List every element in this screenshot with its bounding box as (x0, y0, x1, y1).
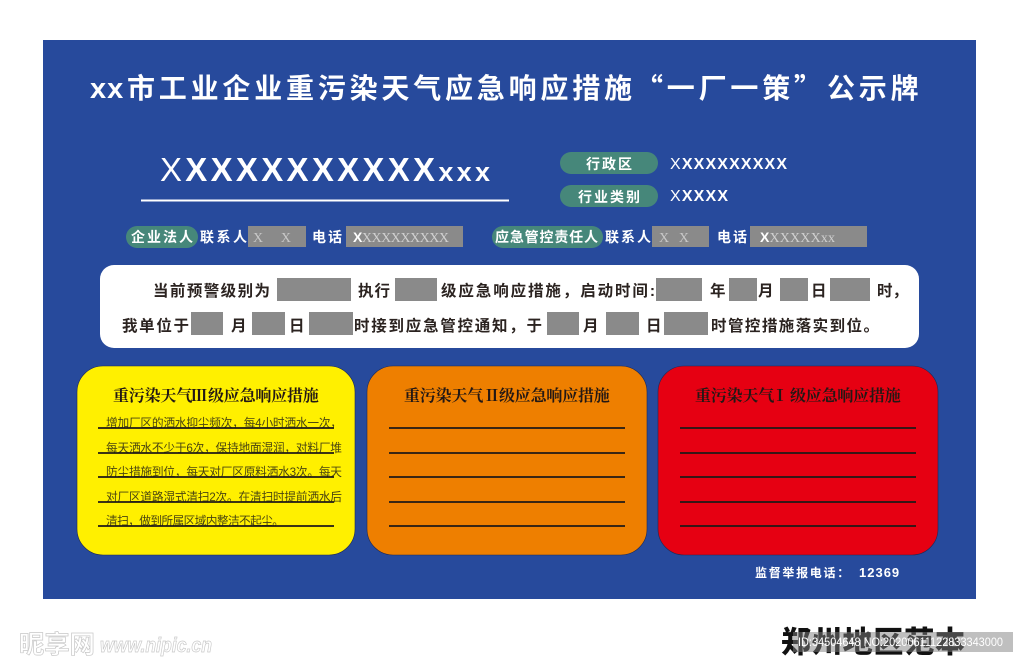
notice line 2 (122, 312, 879, 335)
heading: level I: 级应急响应措施 (790, 386, 901, 405)
level III text lines: 对厂区道路湿式清扫2次。在清扫时提前洒水后 (106, 490, 342, 504)
title: “一厂一策” (635, 67, 826, 107)
notice line 1: 年 (710, 281, 726, 300)
notice line 2: 时接到应急管控通知，于 (354, 316, 542, 335)
legal representative: X X (253, 231, 291, 246)
emergency manager: 应急管控责任人 (495, 229, 598, 245)
panel: blue signboard (43, 40, 976, 599)
legal representative (126, 226, 463, 248)
heading: level I: 重污染天气 (695, 388, 774, 405)
watermark logo: 昵享网 (19, 631, 95, 659)
legal representative: 联系人 (200, 229, 247, 245)
watermark logo: www.nipic.cn (100, 635, 212, 657)
heading: level I: Ⅰ (772, 388, 788, 405)
supervision hotline: 监督举报电话： (755, 565, 851, 580)
notice line 1: 时， (877, 282, 908, 300)
notice line 1: 级应急响应措施，启动时间: (441, 281, 655, 300)
notice line 2: 日 (646, 318, 662, 335)
title: 市工业企业重污染天气应急响应措施 (127, 73, 636, 104)
legal representative: 电话 (312, 229, 342, 245)
heading: level III: Ⅲ (191, 388, 207, 405)
contact row (126, 226, 867, 248)
heading: level III: 重污染天气 (113, 388, 192, 405)
notice line 2: 我单位于 (122, 316, 189, 335)
level III text lines: 增加厂区的洒水抑尘频次，每4小时洒水一次， (106, 416, 342, 430)
title (90, 67, 922, 107)
heading: level II: 重污染天气 (404, 388, 483, 405)
value: district: XXXXXXXXXX (670, 156, 787, 173)
level III text lines (98, 416, 342, 528)
legal representative: XXXXXXXXXX (353, 229, 449, 246)
notice line 2: 时管控措施落实到位。 (711, 316, 879, 335)
notice line 2: 月 (231, 318, 247, 335)
panel: level I measures (658, 366, 938, 555)
heading: level II: 级应急响应措施 (499, 386, 610, 405)
emergency manager: 电话 (717, 229, 747, 245)
title: 公示牌 (827, 73, 922, 104)
panel: level III measures (77, 366, 355, 555)
level III text lines: 防尘措施到位，每天对厂区原料洒水3次。每天 (106, 465, 342, 479)
supervision hotline: 12369 (859, 565, 900, 580)
panel: level II measures (367, 366, 647, 555)
value: industry: XXXXX (670, 188, 728, 205)
watermark logo (19, 631, 212, 659)
legal representative: 企业法人 (131, 229, 193, 245)
pill: industry: 行业类别 (578, 189, 640, 205)
emergency manager: XXXXXXxx (760, 229, 835, 246)
region sample label: 郑州地区范本 (781, 626, 965, 660)
pill: district: 行政区 (586, 156, 632, 172)
notice line 2: 日 (289, 318, 305, 335)
pill: district (560, 152, 658, 174)
notice line 1 (153, 278, 908, 301)
emergency manager (492, 226, 867, 248)
emergency manager: 联系人 (605, 229, 651, 245)
watermark bar: ID:34504648 NO:20200611122833343000 (798, 637, 1003, 649)
notice line 1: 当前预警级别为 (153, 281, 270, 300)
panel: warning notice (100, 265, 919, 348)
region and industry info (560, 152, 787, 207)
watermark bar (793, 632, 1013, 652)
notice line 2: 月 (583, 318, 599, 335)
notice line 1: 日 (811, 283, 827, 300)
level III text lines: 每天洒水不少于6次，保持地面湿润，对料厂堆 (106, 441, 342, 455)
emergency manager: X X (659, 231, 689, 246)
heading: level III: 级应急响应措施 (208, 386, 319, 405)
supervision hotline (755, 565, 900, 580)
notice line 1: 执行 (358, 281, 390, 300)
company name placeholder: XXXXXXXXXXXxxx (160, 151, 490, 188)
pill: industry (560, 185, 658, 207)
notice line 1: 月 (758, 283, 774, 300)
title: xx (90, 73, 124, 105)
heading: level II: Ⅱ (484, 388, 500, 405)
level III text lines: 清扫，做到所属区域内整洁不起尘。 (106, 514, 284, 528)
